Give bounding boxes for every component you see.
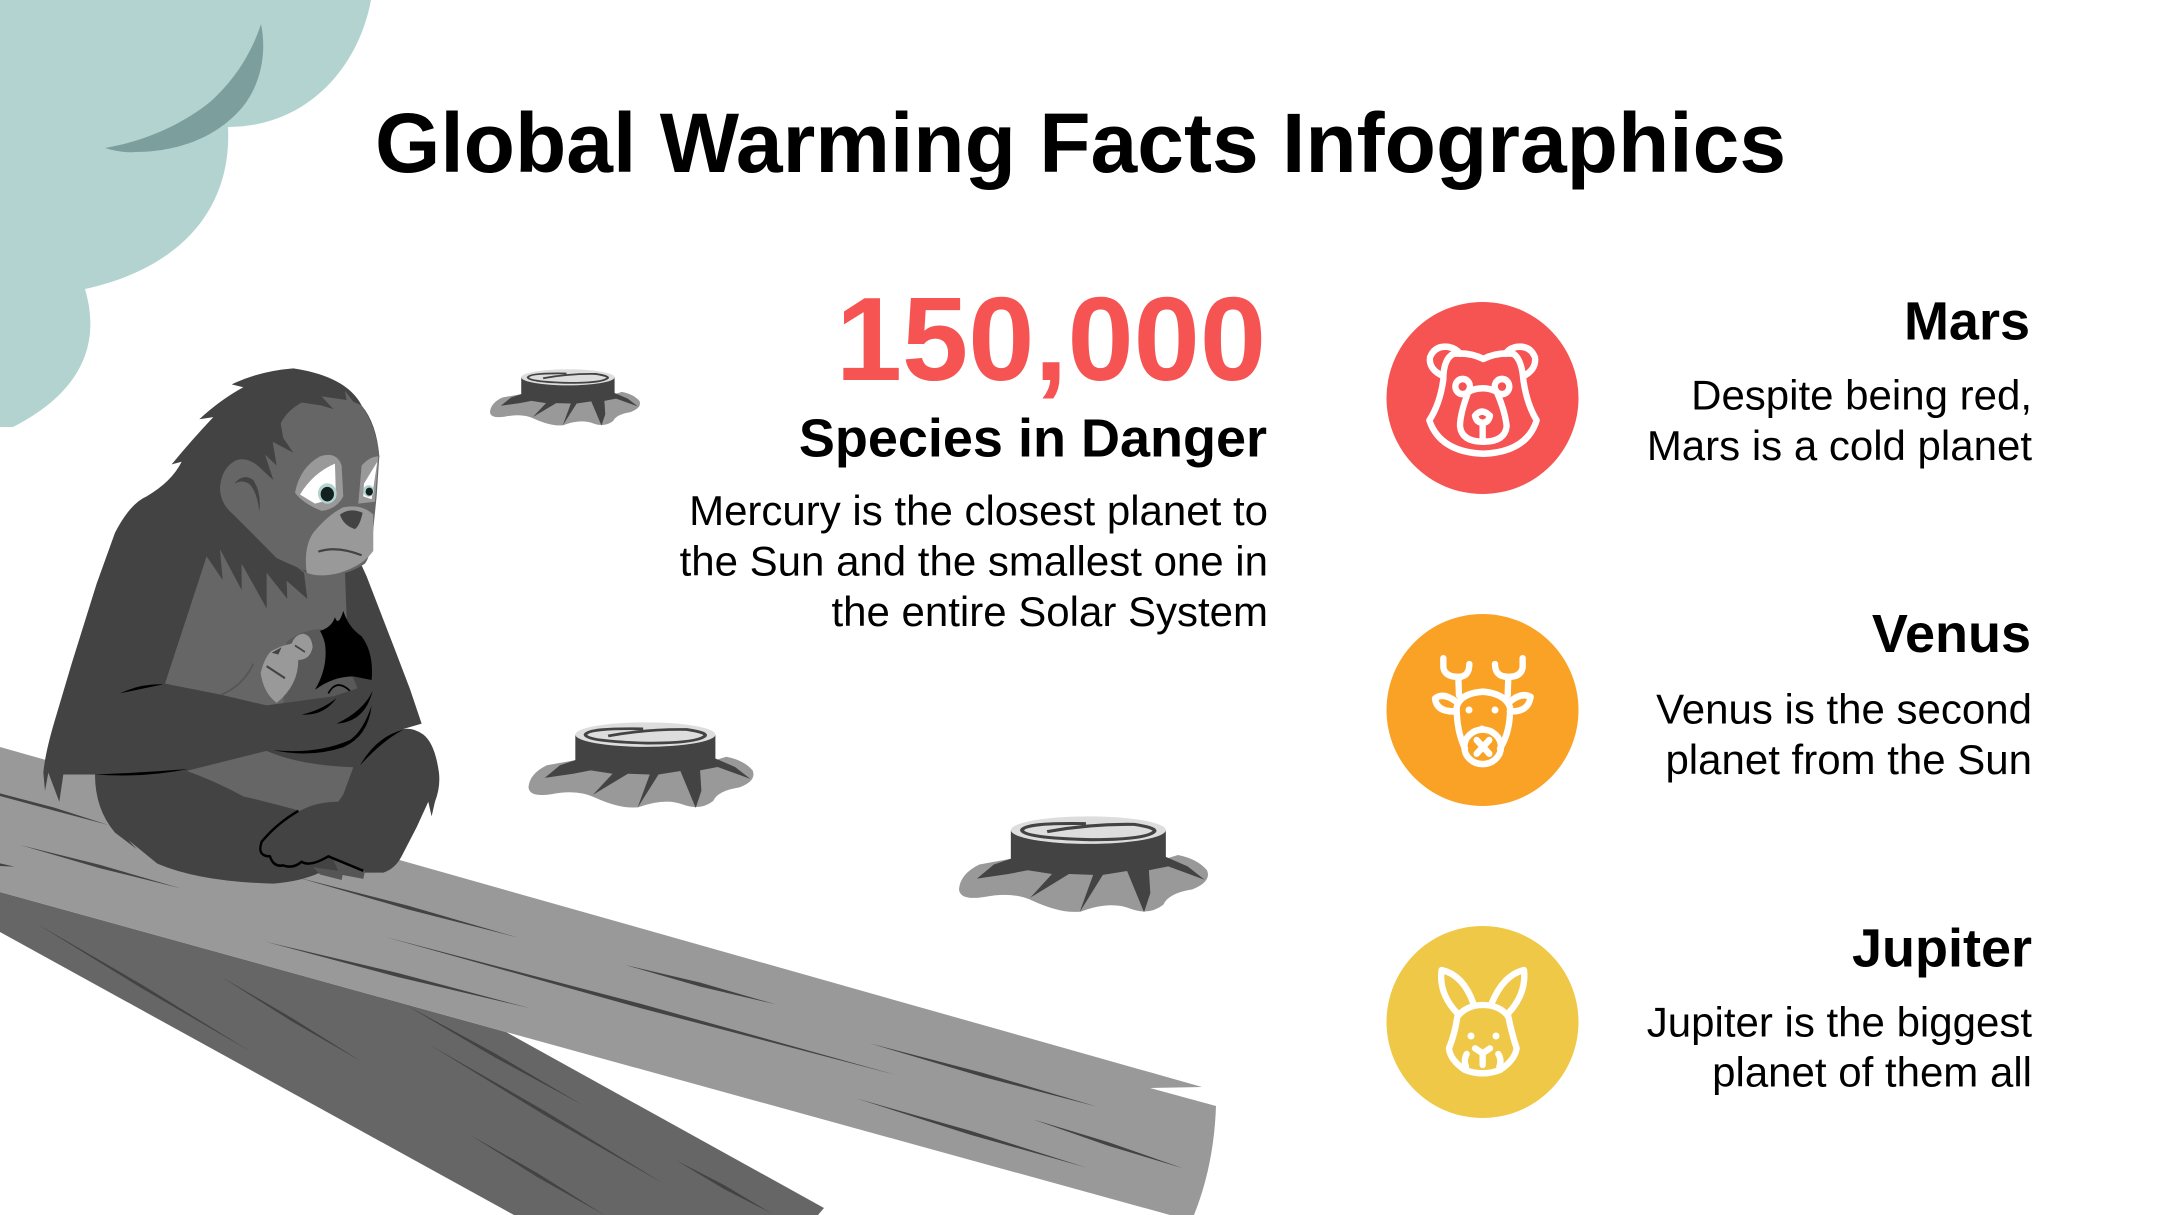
heading: Venus [1872,604,2031,664]
item: Mars [1386,292,2032,494]
description: Jupiter is the biggest [1647,998,2032,1046]
holding arm [100,684,372,775]
description: planet from the Sun [1665,736,2032,783]
heading: Jupiter [1852,918,2032,978]
description: the Sun and the smallest one in [680,538,1268,584]
baby head [283,629,360,705]
muzzle [306,506,373,575]
number: 150,000 [836,273,1266,406]
illustration: large tree stump [959,816,1208,912]
illustration: tree canopy [0,0,371,427]
face and ear [220,391,379,576]
illustration: orangutan holding baby [43,368,439,884]
description: the entire Solar System [831,588,1268,635]
description: Despite being red, [1691,372,2032,418]
item: Venus [1386,604,2032,806]
icon: deer [1386,614,1578,806]
icon: rabbit [1386,926,1578,1118]
main statistic block [680,273,1268,635]
illustration: upper fallen log [0,747,1216,1215]
eye patches [295,455,343,511]
illustration: medium tree stump [528,722,753,808]
subheading: Species in Danger [799,408,1267,468]
baby hair [315,611,372,690]
illustration: lower fallen log [0,892,824,1215]
eyes [300,464,336,504]
baby ear [328,679,355,695]
chest [165,533,347,707]
illustration: small tree stump [490,369,640,426]
mane [200,529,307,608]
item: Jupiter [1386,918,2032,1118]
black contour lines [95,684,403,776]
baby face [261,634,313,703]
description: planet of them all [1712,1048,2032,1096]
heading: Mars [1904,292,2030,352]
ear line [234,477,260,512]
foot [313,860,365,880]
description: Mars is a cold planet [1647,422,2032,469]
icon: bear [1386,302,1578,494]
description: Venus is the second [1656,686,2032,732]
belly [187,751,353,811]
description: Mercury is the closest planet to [689,487,1268,534]
title: Global Warming Facts Infographics [375,96,1786,190]
